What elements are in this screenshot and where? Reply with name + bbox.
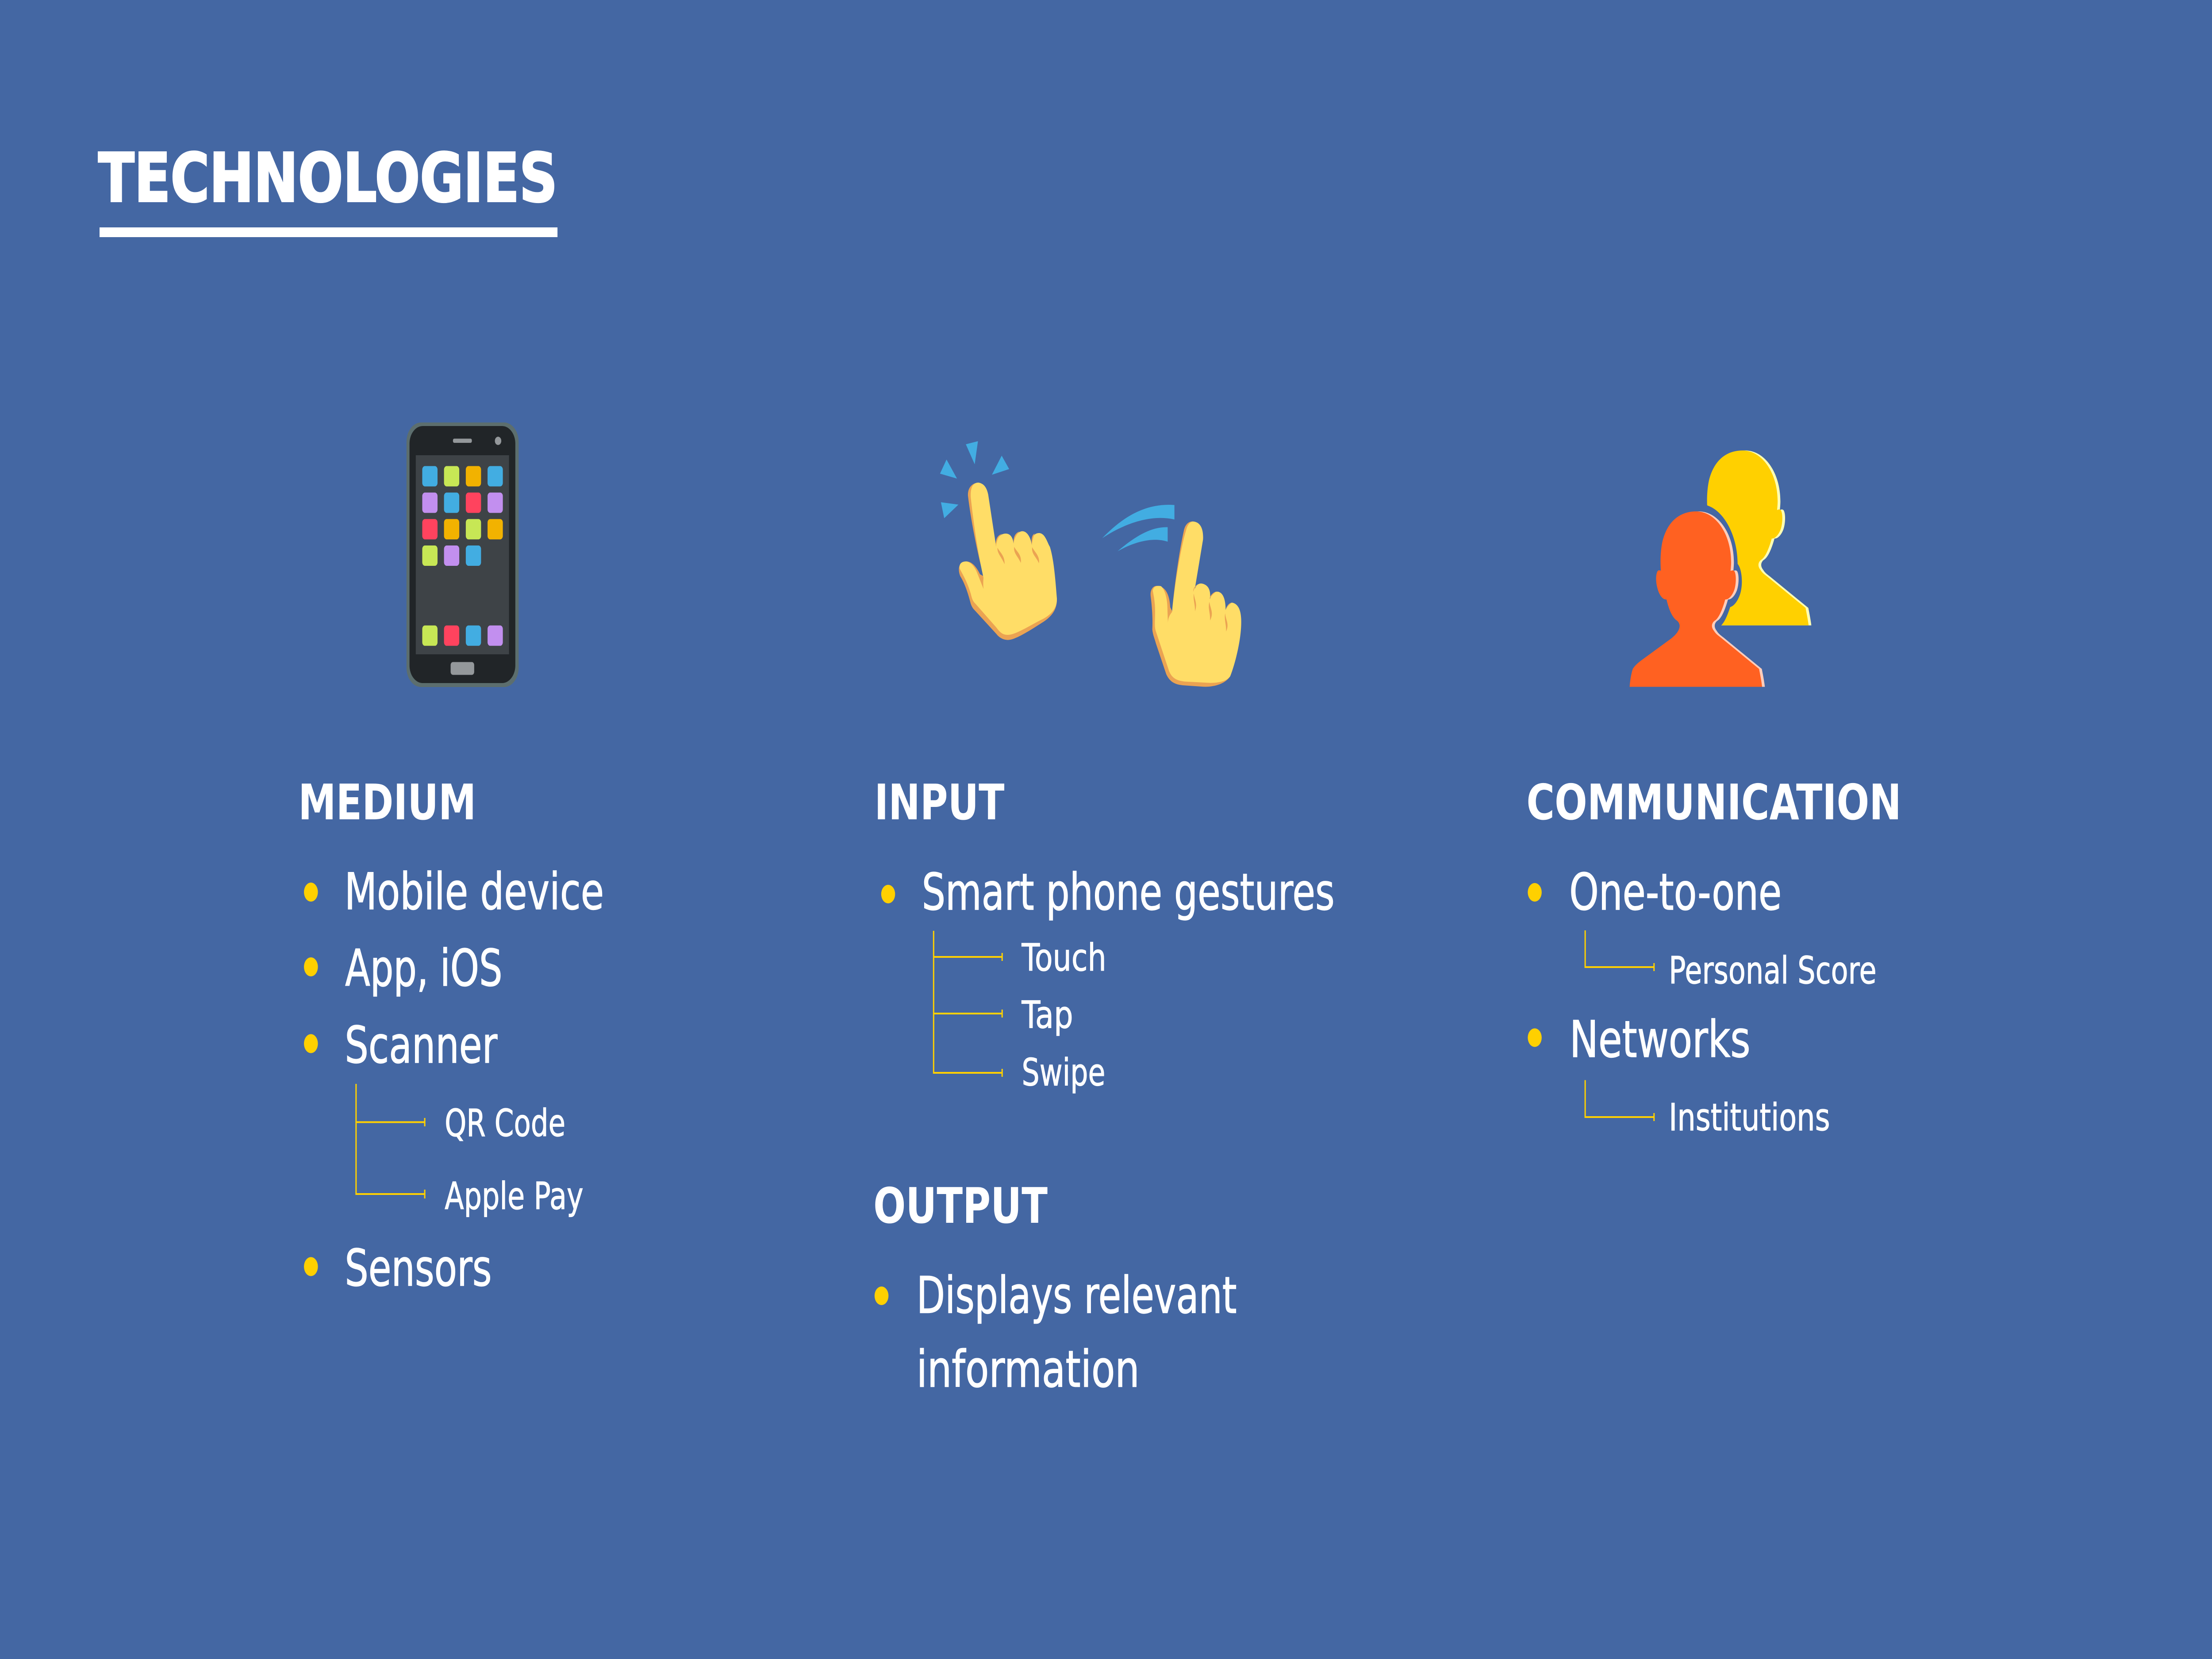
list: output items [875,1266,1237,1399]
list: input items [881,863,1335,1094]
list: input items: Tap [1022,993,1073,1037]
icon: back person [1664,450,1811,626]
icon: smartphone [407,422,518,687]
list: medium items [304,862,604,1298]
icon: front person [1630,511,1765,687]
icon: tap hand [940,441,1057,640]
panel: medium [298,774,604,1298]
heading: output: OUTPUT [873,1178,1048,1235]
icon: tap and swipe hands [940,441,1241,687]
icon: two people [1630,450,1811,687]
list: output items: information [917,1340,1140,1399]
heading: communication: COMMUNICATION [1526,774,1901,831]
list: medium items: Sensors [345,1239,492,1298]
list: communication items: Institutions [1669,1095,1830,1139]
list: input items: Smart phone gestures [922,863,1335,922]
title: TECHNOLOGIES [98,139,557,217]
panel: output [873,1178,1237,1399]
heading: medium: MEDIUM [298,774,476,831]
list: communication items: One-to-one [1569,863,1782,922]
icon: swipe hand [1102,505,1241,687]
panel: input [874,774,1335,1094]
list: input items: Swipe [1022,1050,1105,1094]
panel: communication [1526,774,1901,1139]
list: communication items: Networks [1570,1010,1751,1069]
list: communication items: Personal Score [1669,949,1877,992]
list: medium items: Scanner [345,1016,498,1075]
list: communication items [1528,863,1877,1139]
list: output items: Displays relevant [917,1266,1237,1325]
list: input items: Touch [1022,936,1106,979]
list: medium items: Apple Pay [445,1174,584,1218]
list: medium items: Mobile device [345,862,604,921]
list: medium items: App, iOS [345,939,503,998]
heading: input: INPUT [874,774,1005,831]
list: medium items: QR Code [445,1101,565,1145]
